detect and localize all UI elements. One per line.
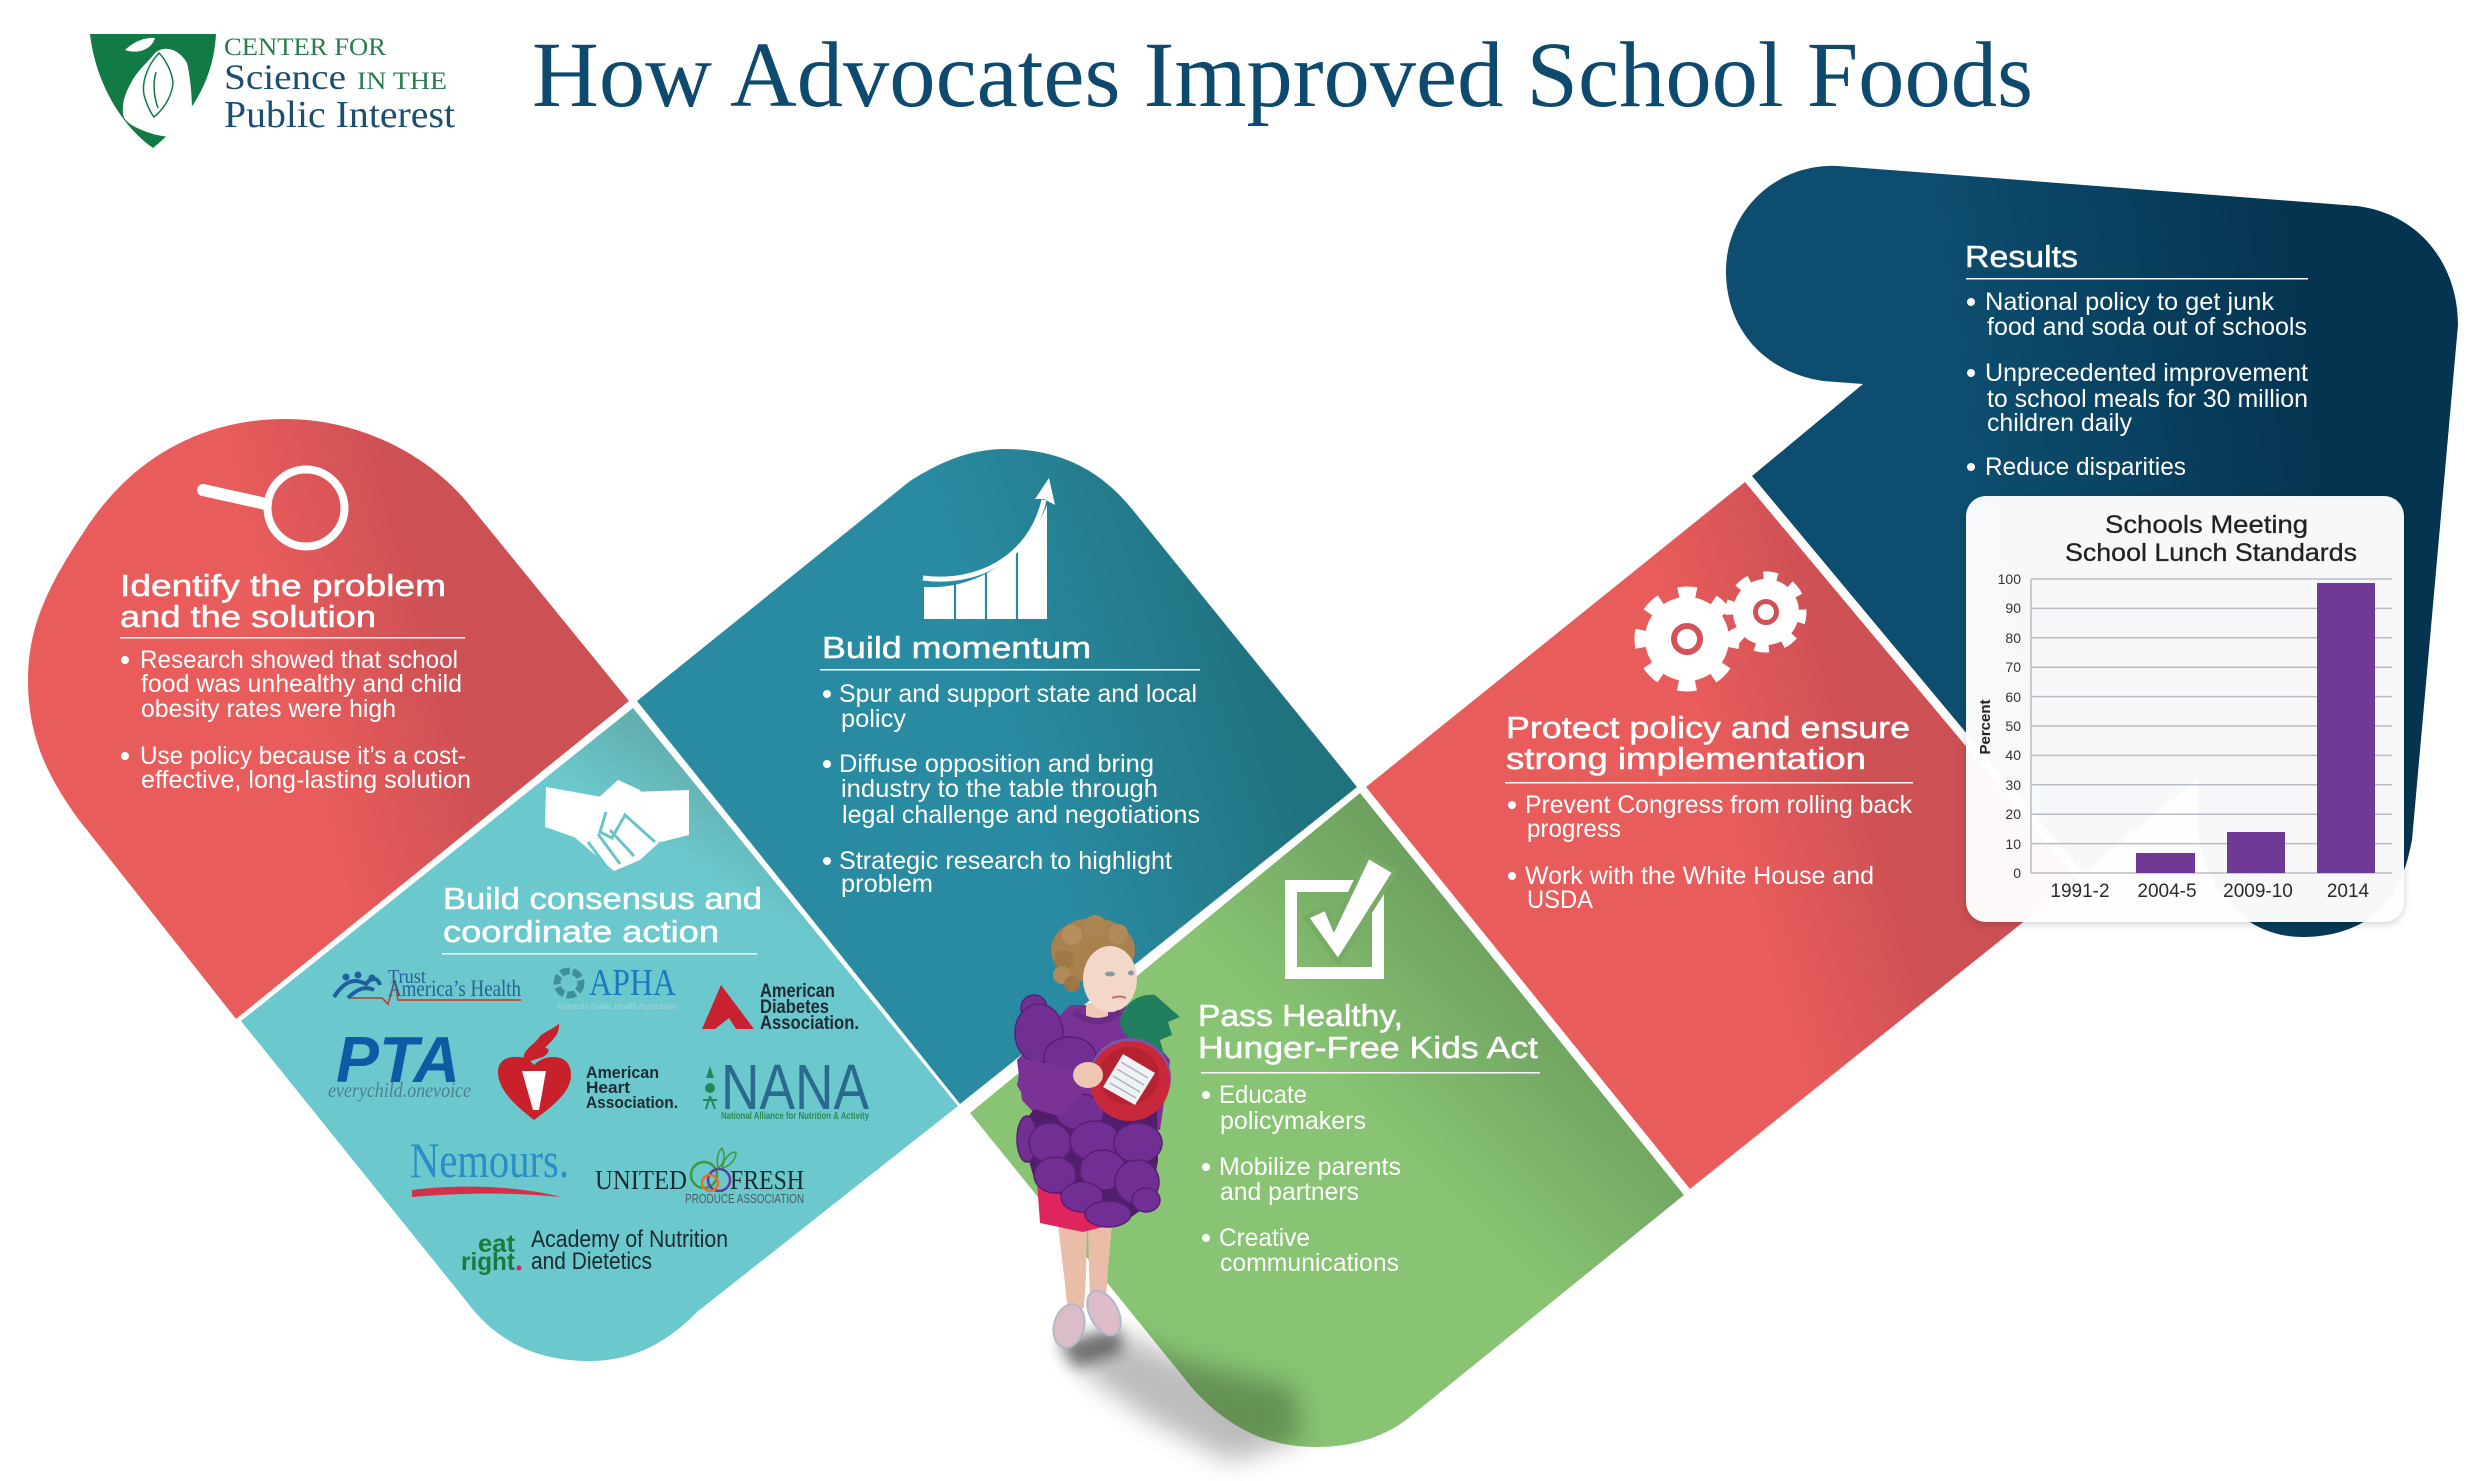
text: results bullets: Unprecedented improvement — [1985, 359, 2308, 387]
chart title: Schools Meeting — [2105, 511, 2308, 539]
chart title: School Lunch Standards — [2065, 539, 2357, 567]
y axis labels: 0 — [2013, 865, 2021, 881]
text: momentum bullets: Diffuse opposition and bring — [839, 750, 1154, 778]
heading: results: Results — [1965, 239, 2078, 274]
logo: American Heart Association: Association. — [586, 1093, 678, 1112]
text: momentum bullets: problem — [841, 870, 933, 898]
logo: eat right Academy of Nutrition and Dietetics: and Dietetics — [531, 1248, 652, 1275]
logo: Center for Science in the Public Interest: CENTER FOR — [224, 34, 386, 61]
text: results bullets: National policy to get junk — [1985, 288, 2275, 316]
y axis title: Percent — [1977, 699, 1994, 755]
y axis labels: 40 — [2005, 747, 2021, 763]
text: protect bullets: Work with the White House and — [1525, 862, 1874, 890]
text: identify bullets — [121, 646, 471, 794]
logo: American Heart Association: American — [586, 1063, 659, 1082]
y axis labels: 80 — [2005, 630, 2021, 646]
logo: Center for Science in the Public Interest: IN THE — [357, 68, 447, 95]
logo: Nemours: Nemours. — [410, 1132, 569, 1188]
logo: American Diabetes Association — [702, 981, 859, 1034]
text: results bullets — [1967, 288, 2308, 481]
legs — [1058, 1225, 1112, 1312]
shadow — [1058, 1328, 1302, 1462]
x axis labels: 2014 — [2327, 881, 2370, 902]
y axis labels: 100 — [1998, 571, 2021, 587]
text: identify bullets: Research showed that school — [140, 646, 458, 674]
text: pass healthy bullets: Mobilize parents — [1219, 1153, 1401, 1181]
text: pass healthy bullets: Educate — [1219, 1081, 1307, 1109]
y axis labels: 50 — [2005, 718, 2021, 734]
y axis labels: 60 — [2005, 689, 2021, 705]
logo: APHA: American Public Health Association — [556, 1002, 678, 1011]
logo: NANA: NANA — [721, 1051, 869, 1123]
sleeve — [1017, 1058, 1082, 1117]
panel: results — [1726, 166, 2458, 937]
icon: checkbox — [1291, 856, 1395, 973]
panel: identify the problem — [28, 419, 629, 1019]
text: results bullets: children daily — [1987, 409, 2132, 437]
shoes — [1049, 1285, 1128, 1351]
text: protect bullets: progress — [1527, 815, 1621, 843]
text: momentum bullets — [823, 680, 1200, 898]
head — [1051, 915, 1137, 1021]
logo: United Fresh: FRESH — [730, 1165, 804, 1195]
heading: identify the problem: Identify the problem — [120, 568, 446, 603]
heading: build consensus: coordinate action — [443, 914, 719, 949]
y axis labels — [1998, 571, 2021, 881]
title: How Advocates Improved School Foods — [532, 24, 2033, 127]
text: results bullets: food and soda out of schools — [1987, 313, 2307, 341]
logo: eat right Academy of Nutrition and Dietetics: Academy of Nutrition — [531, 1226, 728, 1253]
text: results bullets: Reduce disparities — [1985, 453, 2186, 481]
x axis labels: 2009-10 — [2223, 881, 2293, 902]
grape bunch — [1015, 995, 1162, 1227]
plate with note — [1089, 1038, 1171, 1121]
logo: American Diabetes Association: Diabetes — [760, 997, 829, 1018]
logo: United Fresh: PRODUCE ASSOCIATION — [685, 1191, 804, 1206]
text: pass healthy bullets — [1202, 1081, 1401, 1277]
x axis labels: 2004-5 — [2137, 881, 2197, 902]
logo: PTA: PTA — [336, 1023, 460, 1096]
heading: build momentum: Build momentum — [822, 630, 1091, 665]
logo: Center for Science in the Public Interest — [90, 34, 455, 148]
text: pass healthy bullets: communications — [1220, 1249, 1399, 1277]
heading: identify the problem — [120, 568, 465, 638]
hand — [1073, 1062, 1103, 1088]
chart title — [2065, 511, 2357, 567]
heading: pass healthy: Pass Healthy, — [1198, 998, 1403, 1033]
text: identify bullets: effective, long-lasting solution — [141, 766, 471, 794]
logo: Center for Science in the Public Interest: Public Interest — [224, 94, 455, 136]
logo: United Fresh: UNITED — [595, 1165, 687, 1195]
y axis labels: 10 — [2005, 836, 2021, 852]
panel: protect policy — [1366, 482, 2077, 1189]
text: momentum bullets: policy — [841, 705, 907, 733]
logo: Trust for America's Health: Trust — [388, 966, 426, 988]
text: identify bullets: Use policy because it’s a cost- — [140, 742, 466, 770]
x axis labels: 1991-2 — [2050, 881, 2110, 902]
photo illustration: child in grape costume — [1015, 915, 1302, 1462]
text: pass healthy bullets: policymakers — [1220, 1107, 1366, 1135]
text: momentum bullets: industry to the table through — [841, 775, 1158, 803]
text: momentum bullets: Spur and support state and local — [839, 680, 1197, 708]
logo: PTA: everychild.onevoice — [328, 1078, 471, 1102]
logo: eat right Academy of Nutrition and Dietetics: eat — [478, 1230, 516, 1258]
y axis labels: 20 — [2005, 806, 2021, 822]
logo: Trust for America's Health — [334, 966, 521, 1004]
heading: build consensus — [442, 881, 762, 954]
shirt — [1017, 1005, 1170, 1130]
y axis labels: 70 — [2005, 659, 2021, 675]
logo: American Heart Association — [498, 1023, 678, 1120]
logo: eat right Academy of Nutrition and Dietetics: right — [461, 1248, 516, 1276]
text: identify bullets: obesity rates were high — [141, 695, 396, 723]
heading: pass healthy: Hunger-Free Kids Act — [1198, 1030, 1538, 1065]
logo: American Diabetes Association: Association. — [760, 1013, 859, 1034]
text: momentum bullets: Strategic research to highlight — [839, 847, 1172, 875]
y axis labels: 90 — [2005, 600, 2021, 616]
icon: handshake — [545, 780, 689, 871]
logo: American Diabetes Association: American — [760, 981, 835, 1002]
panel: build momentum — [637, 449, 1357, 1104]
heading: identify the problem: and the solution — [120, 599, 376, 634]
logo: Center for Science in the Public Interest: Science — [224, 57, 346, 97]
icon: magnifying glass — [203, 470, 344, 546]
logo: APHA — [556, 962, 678, 1011]
logo: American Heart Association: Heart — [586, 1078, 630, 1097]
text: momentum bullets: legal challenge and negotiations — [842, 801, 1200, 829]
icon: green shield with leaves — [90, 34, 216, 148]
bars — [2136, 583, 2375, 873]
icon: gears — [1640, 576, 1802, 686]
text: pass healthy bullets: and partners — [1220, 1178, 1359, 1206]
heading: protect policy: strong implementation — [1506, 741, 1866, 776]
text: pass healthy bullets: Creative — [1219, 1224, 1310, 1252]
y axis labels: 30 — [2005, 777, 2021, 793]
heading: pass healthy — [1198, 998, 1540, 1074]
panel: pass healthy hunger-free kids act — [970, 793, 1684, 1447]
panel: build consensus — [241, 708, 958, 1361]
logo: Trust for America's Health: America’s Health — [388, 976, 521, 1001]
heading: build consensus: Build consensus and — [443, 881, 762, 916]
text: protect bullets — [1508, 791, 1912, 914]
text: protect bullets: Prevent Congress from rolling back — [1525, 791, 1912, 819]
logo: APHA: APHA — [589, 962, 676, 1004]
x axis labels — [2050, 881, 2370, 902]
heading: protect policy — [1505, 710, 1913, 784]
skirt — [1037, 1180, 1130, 1232]
text: identify bullets: food was unhealthy and child — [141, 670, 462, 698]
logo: eat right Academy of Nutrition and Dietetics — [461, 1226, 728, 1276]
logo: United Fresh — [595, 1148, 804, 1206]
text: protect bullets: USDA — [1527, 886, 1593, 914]
text: results bullets: to school meals for 30 million — [1987, 385, 2308, 413]
heading: protect policy: Protect policy and ensure — [1506, 710, 1910, 745]
chart card: schools meeting school lunch standards — [1966, 496, 2404, 922]
icon: rising bar chart with arrow — [923, 478, 1055, 619]
logo: NANA: National Alliance for Nutrition & Activity — [721, 1111, 869, 1122]
leaf — [1120, 995, 1180, 1058]
